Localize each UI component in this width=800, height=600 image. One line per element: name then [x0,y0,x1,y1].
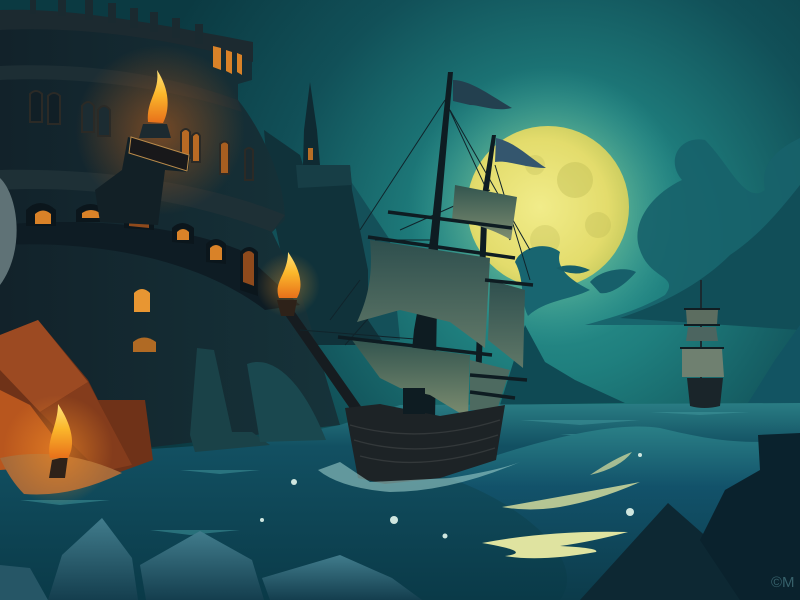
foreground rocks [0,518,422,600]
watermark: ©M [771,574,795,591]
crenellations [30,0,203,44]
upper windows [30,91,253,180]
moon reflections [482,452,640,558]
distant mountains [350,180,800,405]
masts [405,72,453,420]
main ship [300,72,546,492]
sphere at edge [0,178,17,285]
castle [0,0,340,448]
sea [0,403,800,600]
small distant ship [680,280,724,408]
balcony [95,137,190,225]
torch pole [256,252,365,420]
distant tower [264,82,385,345]
dark rocks bottom right [580,433,800,600]
foreground wave [440,426,800,600]
hull [345,404,505,484]
foam dots [260,453,642,538]
yards [338,212,533,398]
clouds [515,138,800,330]
flags [453,80,512,109]
stone pillars and rock [190,348,326,452]
lit arched windows [35,210,254,352]
rigging [300,100,530,345]
bow wake [318,462,520,492]
sea highlights [20,412,750,535]
sails [452,185,517,240]
balcony flame [148,70,168,123]
rock ruins at left [0,320,153,505]
arch recesses [26,203,258,296]
moon [408,67,688,347]
